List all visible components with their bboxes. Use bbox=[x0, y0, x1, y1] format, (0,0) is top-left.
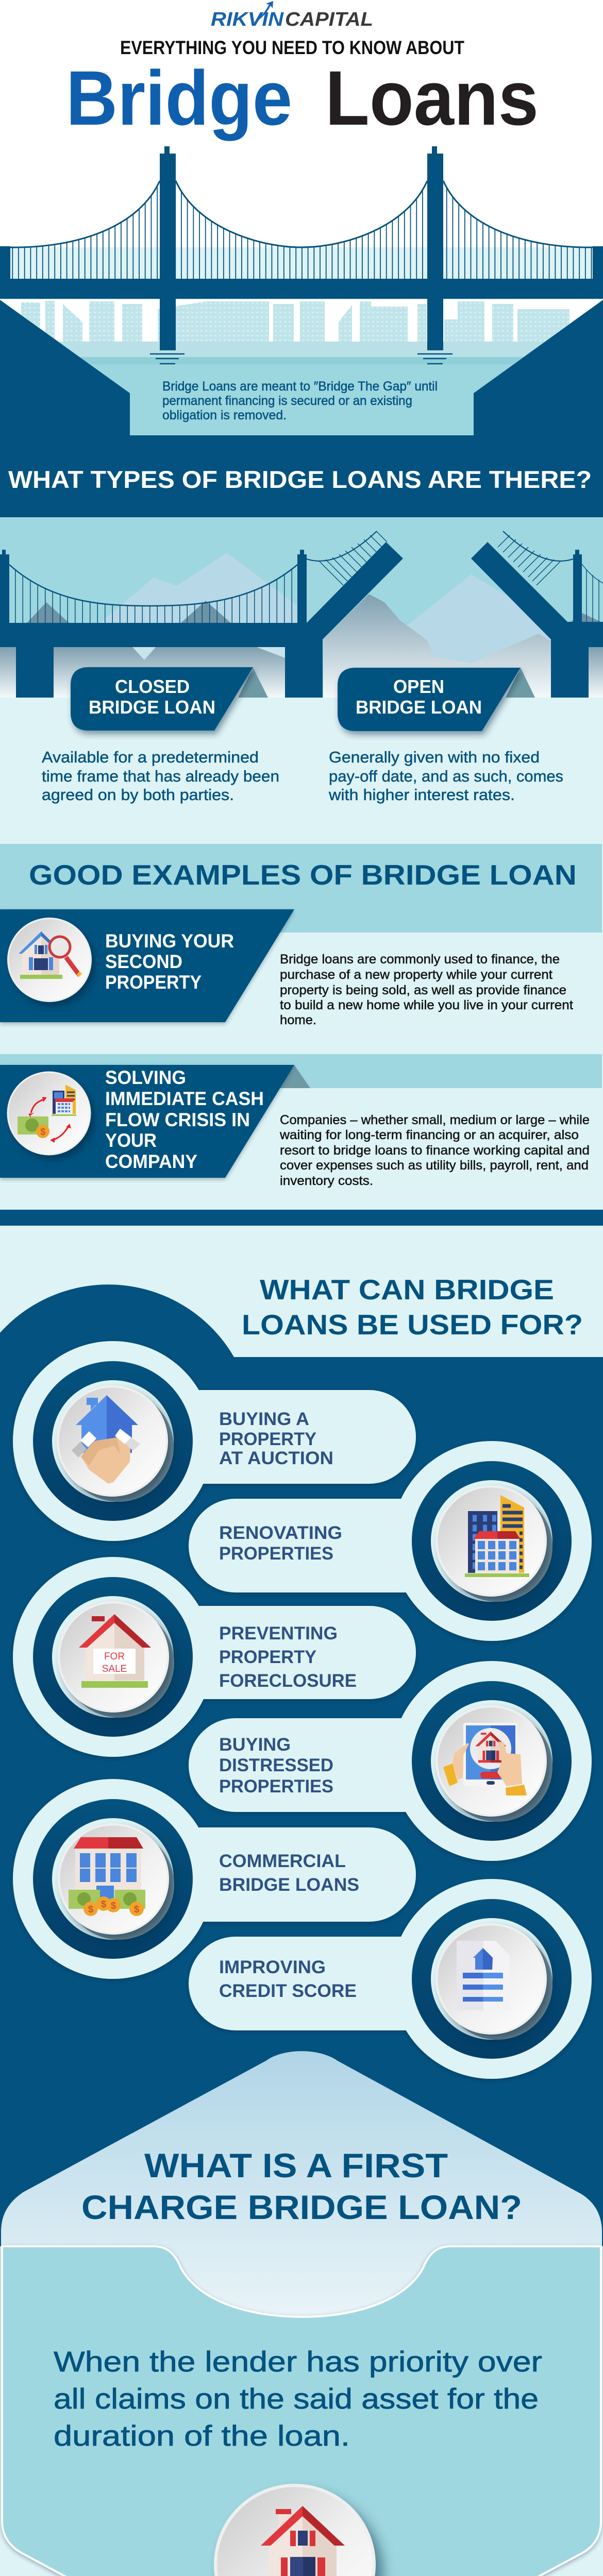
left bridge structure bbox=[0, 542, 403, 698]
label: PROPERTIES bbox=[219, 1776, 333, 1797]
panel: first charge definition bbox=[2, 2246, 601, 2576]
icon: for sale house bbox=[58, 1601, 174, 1719]
label: CREDIT SCORE bbox=[219, 1981, 357, 2001]
icon: building and money exchange bbox=[7, 1072, 95, 1160]
label bbox=[219, 1851, 359, 1895]
badge fold 1 bbox=[238, 668, 268, 698]
right bridge structure bbox=[471, 542, 603, 698]
label: BRIDGE LOANS bbox=[219, 1875, 359, 1895]
icon: commercial building with money bbox=[58, 1823, 174, 1941]
badge: closed bridge loan: BRIDGE LOAN bbox=[89, 697, 215, 718]
badge: closed bridge loan: CLOSED bbox=[115, 676, 190, 697]
label: FLOW CRISIS IN bbox=[105, 1109, 250, 1130]
heading: types: WHAT TYPES OF BRIDGE LOANS ARE THERE? bbox=[8, 466, 592, 493]
label: AT AUCTION bbox=[219, 1448, 333, 1468]
text: open loan bbox=[328, 748, 563, 804]
text: second property: to build a new home while you live in your current bbox=[280, 998, 573, 1012]
icon: house on hand bbox=[214, 2484, 383, 2576]
icon: tablet with house bbox=[435, 1705, 552, 1823]
use 2: renovating bbox=[189, 1441, 592, 1641]
icon: for sale house: SALE bbox=[102, 1664, 127, 1674]
intro text: permanent financing is secured or an existing bbox=[162, 394, 412, 408]
label: PROPERTY bbox=[105, 972, 202, 993]
text: first charge definition: When the lender has priority over bbox=[54, 2345, 542, 2378]
text: open loan: pay-off date, and as such, comes bbox=[329, 767, 563, 785]
use 6: improving credit score bbox=[189, 1879, 592, 2079]
use 4: distressed properties bbox=[189, 1661, 592, 1861]
icon: for sale house: FOR bbox=[104, 1651, 125, 1662]
heading: first charge bbox=[81, 2146, 522, 2226]
label: PROPERTY bbox=[219, 1429, 316, 1449]
cliffs and dark backing bbox=[0, 299, 603, 517]
title: Bridge bbox=[66, 55, 292, 141]
water ripple marks bbox=[150, 354, 453, 364]
label bbox=[219, 1623, 357, 1691]
panel: buying second property bbox=[0, 909, 294, 1022]
sky bbox=[0, 517, 603, 698]
intro text: obligation is removed. bbox=[162, 408, 287, 422]
hero bridge illustration bbox=[0, 146, 603, 517]
heading: first charge: CHARGE BRIDGE LOAN? bbox=[81, 2188, 522, 2226]
icon: commercial building with money: $ bbox=[101, 1899, 107, 1910]
label: DISTRESSED bbox=[219, 1755, 333, 1775]
text: cash flow: cover expenses such as utility bills, payroll, rent, and bbox=[280, 1158, 589, 1173]
text: closed loan: agreed on by both parties. bbox=[42, 786, 234, 804]
badge fold 2 bbox=[506, 668, 535, 698]
heading: first charge: WHAT IS A FIRST bbox=[144, 2146, 448, 2184]
label: COMMERCIAL bbox=[219, 1851, 346, 1871]
label bbox=[219, 1409, 333, 1468]
text: second property: Bridge loans are commonly used to finance, the bbox=[280, 952, 560, 967]
use 1: buying at auction bbox=[13, 1341, 416, 1541]
panel: cash flow crisis bbox=[0, 1065, 310, 1178]
label: SOLVING bbox=[105, 1067, 186, 1088]
deck and towers bbox=[0, 146, 603, 349]
badge: open bridge loan: BRIDGE LOAN bbox=[356, 697, 482, 718]
label: YOUR bbox=[105, 1130, 157, 1151]
icon: commercial building with money: $ bbox=[88, 1904, 94, 1915]
text: second property: home. bbox=[280, 1013, 316, 1027]
intro text: Bridge Loans are meant to ″Bridge The Gap″ until bbox=[162, 379, 438, 394]
band: second example bbox=[0, 1054, 602, 1088]
text: closed loan: Available for a predetermined bbox=[42, 748, 259, 766]
use 3: preventing foreclosure bbox=[13, 1557, 416, 1757]
heading: uses: WHAT CAN BRIDGE bbox=[260, 1274, 554, 1306]
icon: commercial building with money: $ bbox=[111, 1901, 116, 1911]
text: cash flow: Companies – whether small, medium or large – while bbox=[280, 1113, 590, 1127]
badge: closed bridge loan bbox=[71, 667, 253, 731]
icon: buildings bbox=[435, 1485, 552, 1603]
text: open loan: Generally given with no fixed bbox=[329, 748, 540, 766]
use 5: commercial bridge loans bbox=[13, 1779, 416, 1979]
icon: commercial building with money: $ bbox=[134, 1904, 140, 1915]
intro text bbox=[162, 379, 438, 422]
logo: CAPITAL bbox=[285, 9, 373, 30]
logo: RIKVIN bbox=[211, 9, 284, 30]
text: first charge definition: all claims on the said asset for the bbox=[54, 2382, 539, 2415]
text: open loan: with higher interest rates. bbox=[328, 786, 515, 804]
heading: uses: LOANS BE USED FOR? bbox=[242, 1309, 583, 1341]
light background below dark section bbox=[0, 2246, 603, 2576]
heading: good examples: GOOD EXAMPLES OF BRIDGE LOAN bbox=[29, 859, 577, 891]
mountains bbox=[0, 553, 603, 698]
hangers bbox=[10, 181, 593, 279]
title bbox=[66, 55, 539, 141]
divider band bbox=[0, 1210, 603, 1226]
label: RENOVATING bbox=[219, 1523, 342, 1543]
icon: house handshake bbox=[57, 1385, 173, 1503]
label: IMPROVING bbox=[219, 1957, 326, 1977]
badge: open bridge loan: OPEN bbox=[393, 676, 444, 697]
label: SECOND bbox=[105, 951, 182, 972]
label: BUYING YOUR bbox=[105, 930, 234, 952]
text: cash flow: resort to bridge loans to finance working capital and bbox=[280, 1143, 590, 1158]
section: header bbox=[0, 0, 603, 247]
text: closed loan bbox=[42, 748, 279, 804]
icon: building and money exchange: $ bbox=[40, 1127, 46, 1138]
label bbox=[219, 1523, 342, 1564]
title: Loans bbox=[325, 55, 539, 141]
label bbox=[105, 930, 234, 993]
panel: loan type descriptions background bbox=[0, 698, 603, 844]
text: second property: property is being sold, as well as provide finance bbox=[280, 983, 566, 997]
label bbox=[219, 1735, 333, 1797]
tagline: EVERYTHING YOU NEED TO KNOW ABOUT bbox=[120, 37, 464, 58]
text: cash flow bbox=[279, 1113, 590, 1188]
closed bridge hangers bbox=[9, 565, 297, 623]
heading: uses bbox=[242, 1274, 583, 1341]
panel: types of bridge loans bbox=[0, 517, 603, 698]
text: second property bbox=[280, 952, 573, 1027]
label: IMMEDIATE CASH bbox=[105, 1088, 264, 1109]
cables bbox=[10, 181, 593, 247]
label bbox=[105, 1067, 264, 1172]
icon: house and magnifier bbox=[7, 918, 95, 1007]
label: PREVENTING bbox=[219, 1623, 338, 1643]
panel: first charge heading bbox=[1, 2051, 602, 2318]
badge: open bridge loan bbox=[338, 668, 521, 731]
label: BUYING A bbox=[219, 1409, 309, 1429]
label: BUYING bbox=[219, 1735, 291, 1755]
icon: credit report bbox=[435, 1923, 552, 2041]
label: PROPERTIES bbox=[219, 1544, 333, 1564]
text: closed loan: time frame that has already been bbox=[42, 767, 279, 785]
dark background shape bbox=[0, 1284, 603, 2257]
band: good examples bbox=[0, 844, 602, 933]
logo bbox=[211, 1, 373, 30]
text: second property: purchase of a new property while your current bbox=[280, 968, 552, 982]
text: first charge definition: duration of the loan. bbox=[54, 2419, 350, 2452]
text: cash flow: waiting for long-term financing or an acquirer, also bbox=[279, 1128, 579, 1142]
water pool and skyline bbox=[0, 300, 603, 435]
label: PROPERTY bbox=[219, 1647, 316, 1667]
label: FORECLOSURE bbox=[219, 1671, 357, 1691]
label: COMPANY bbox=[105, 1151, 197, 1172]
closed bridge cable bbox=[9, 565, 297, 606]
label bbox=[219, 1957, 357, 2001]
raised span cables bbox=[307, 531, 603, 623]
text: cash flow: inventory costs. bbox=[280, 1174, 373, 1188]
text: first charge definition bbox=[54, 2345, 542, 2452]
